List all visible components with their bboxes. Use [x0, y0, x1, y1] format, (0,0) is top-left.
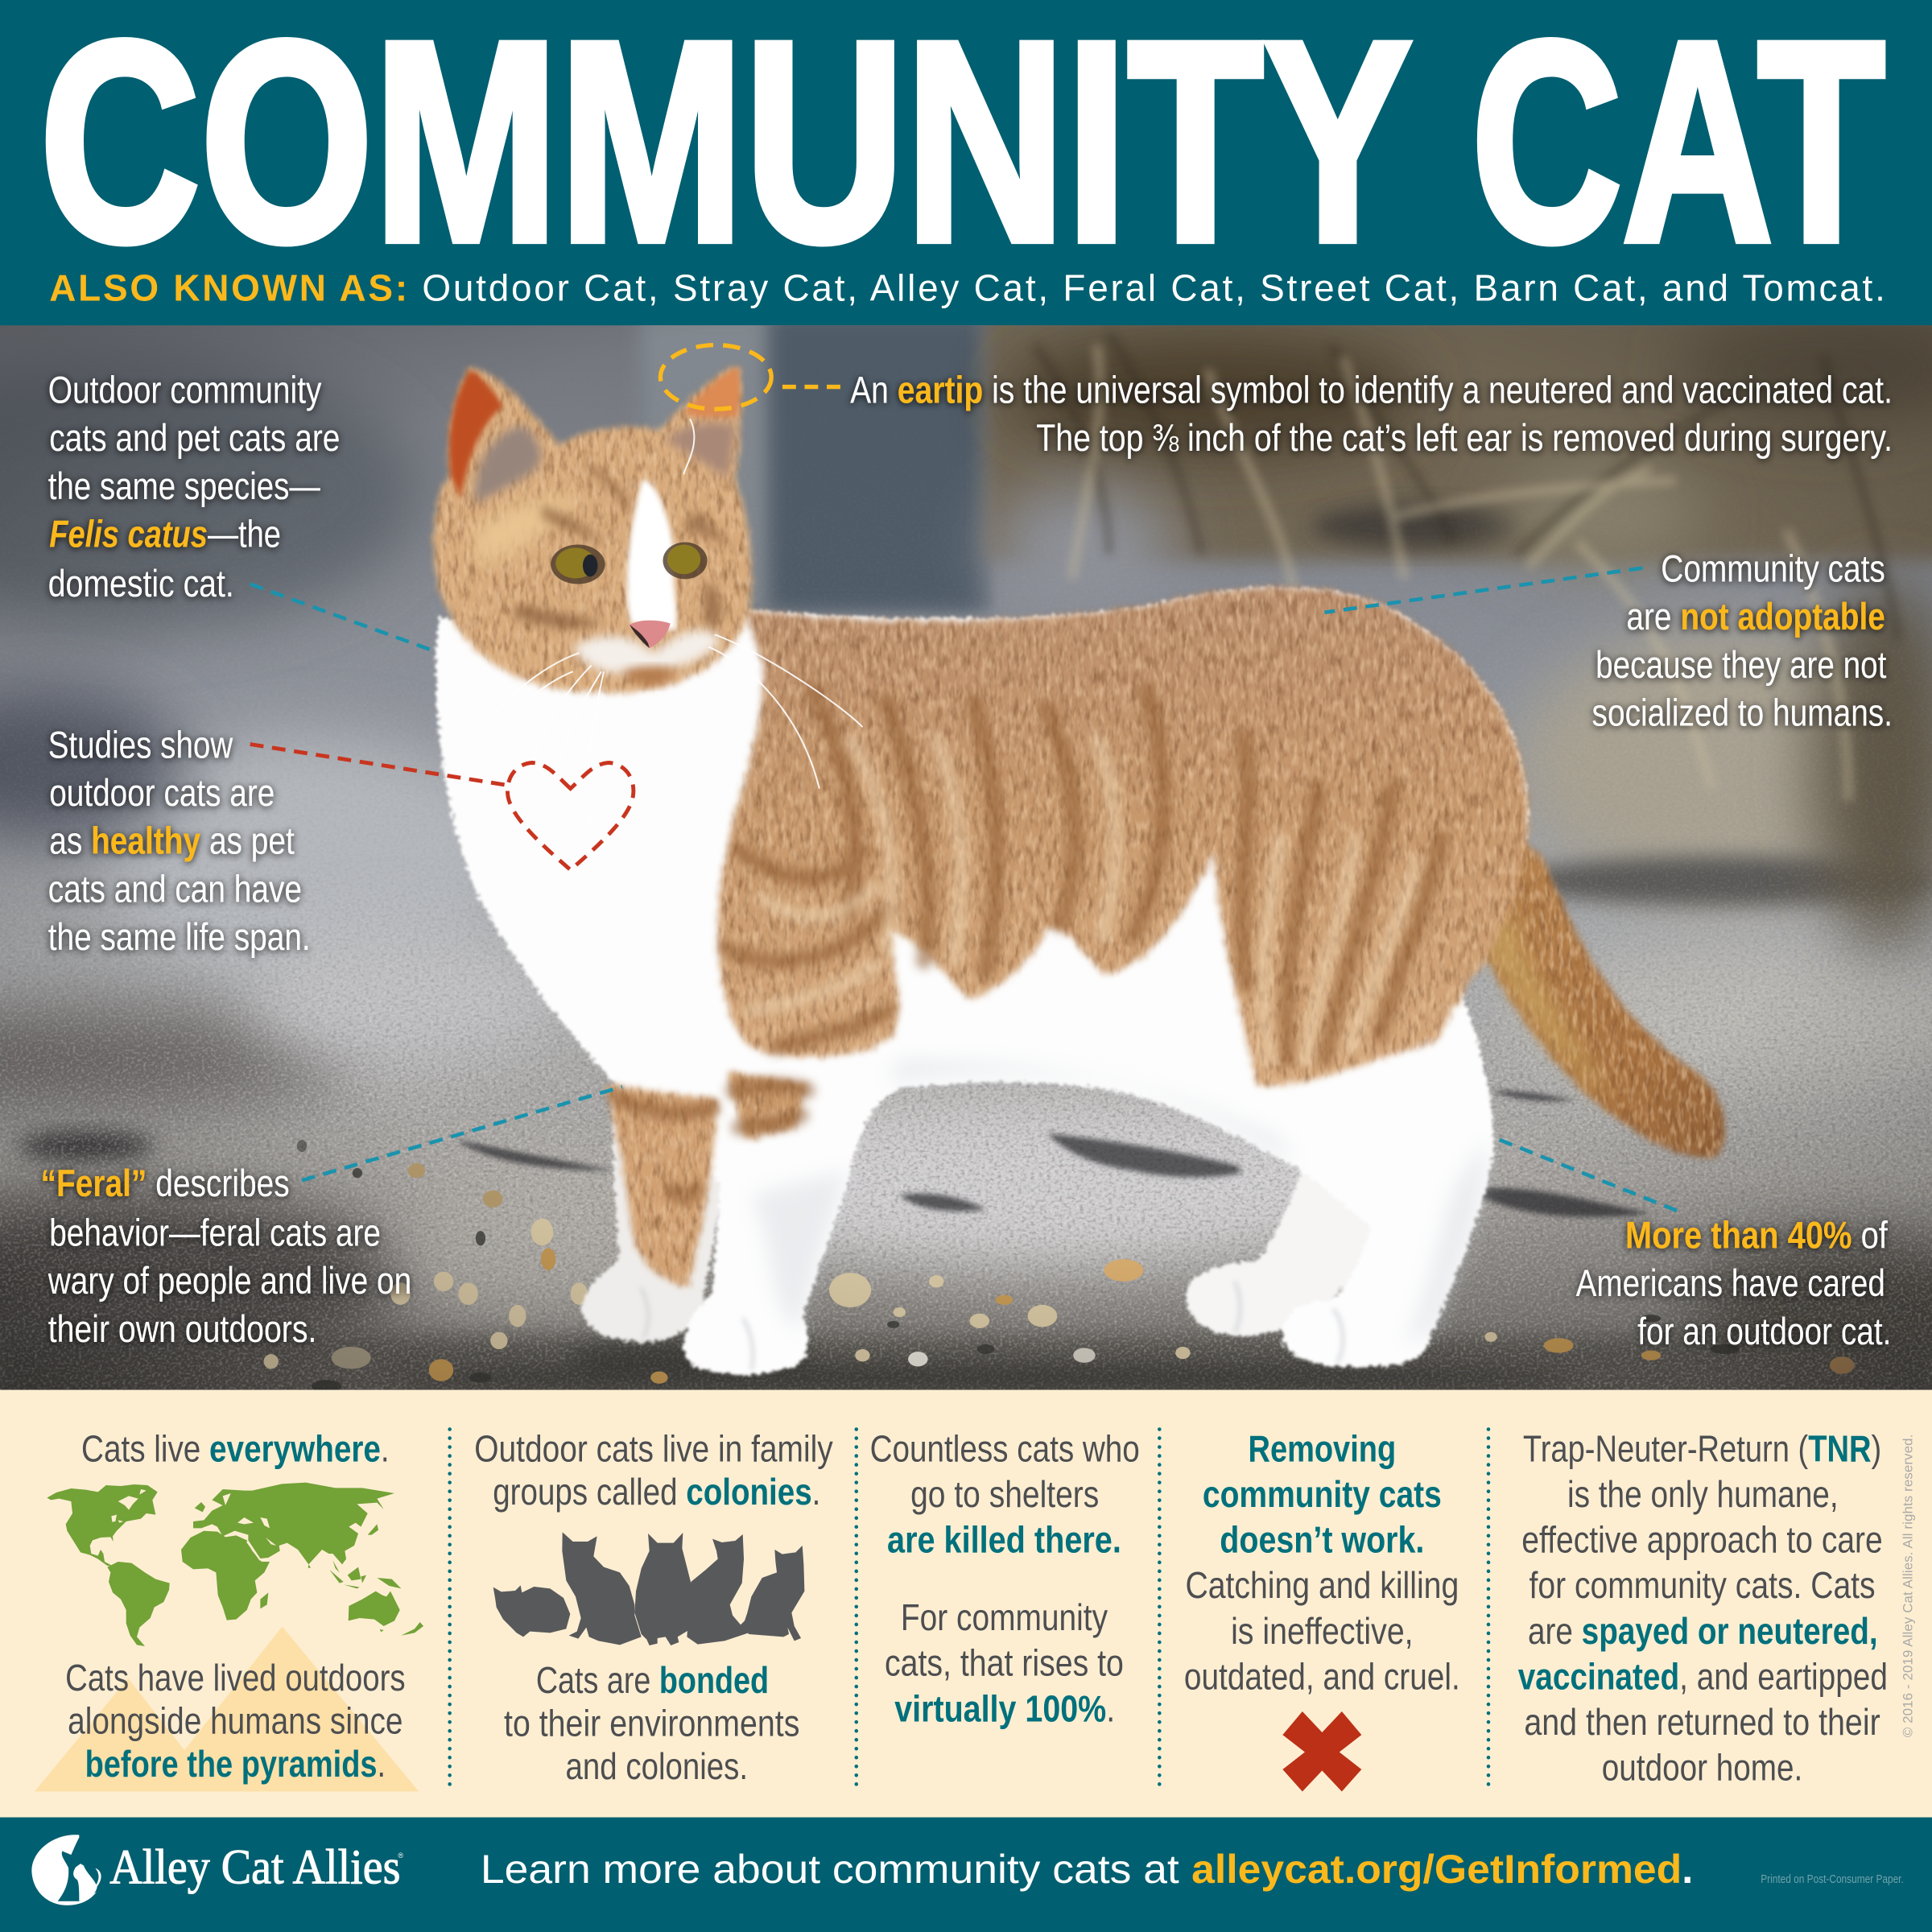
text: felis catus: Outdoor community: [48, 369, 322, 412]
icon: world map: [47, 1483, 423, 1646]
text: healthy: [48, 724, 311, 959]
text: feral: wary of people and live on: [47, 1260, 411, 1302]
cat whiskers: [487, 419, 862, 826]
logo wordmark: Alley Cat Allies: [109, 1840, 400, 1895]
panel: tnr: outdoor home.: [1602, 1747, 1802, 1789]
cat tail: [1466, 838, 1725, 1158]
photo background: [0, 314, 1932, 1411]
panel: cats live everywhere: [35, 1427, 423, 1792]
panel: removing cats: outdated, and cruel.: [1184, 1655, 1460, 1697]
text: felis catus: cats and pet cats are: [49, 417, 340, 460]
panel: tnr: is the only humane,: [1567, 1473, 1839, 1515]
cat white body: [436, 588, 1528, 1374]
panel: removing cats: is ineffective,: [1231, 1610, 1414, 1652]
panel: cat photo: [0, 314, 1932, 1411]
map water cut-outs: [111, 1489, 276, 1546]
text: feral: “Feral” describes: [41, 1162, 290, 1205]
text: eartip: [850, 369, 1893, 460]
also known as line: ALSO KNOWN AS: Outdoor Cat, Stray Cat, Alley Cat, Feral Cat, Street Cat, Barn Cat, and Tomcat.: [49, 266, 1885, 308]
cat head: [434, 366, 862, 826]
text: healthy: Studies show: [48, 724, 233, 766]
text: feral: their own outdoors.: [48, 1308, 316, 1351]
text: feral: behavior—feral cats are: [49, 1212, 381, 1254]
cat eyes: [551, 542, 708, 584]
panel: tnr: for community cats. Cats: [1529, 1564, 1876, 1606]
panel: cats live everywhere: Cats live everywhere.: [81, 1427, 390, 1469]
panel: removing cats: Catching and killing: [1185, 1564, 1459, 1606]
panel: removing cats: doesn’t work.: [1220, 1519, 1424, 1561]
call to action: Learn more about community cats at: [481, 1846, 1179, 1892]
text: feral: [41, 1162, 411, 1351]
cat paws: [641, 1282, 1343, 1370]
panel: colonies: groups called colonies.: [493, 1471, 820, 1513]
panel: colonies: to their environments: [504, 1703, 799, 1744]
cat: [434, 366, 1725, 1374]
panel: shelters: For community: [901, 1596, 1108, 1638]
text: healthy: the same life span.: [48, 916, 311, 959]
cat fur highlights: [749, 739, 1417, 1059]
panel: removing cats: [1184, 1427, 1460, 1792]
panel: shelters: virtually 100%.: [894, 1687, 1115, 1729]
text: healthy: outdoor cats are: [49, 772, 275, 815]
cat soft shading: [752, 1059, 1486, 1343]
text: felis catus: [48, 369, 340, 605]
panel: tnr: and then returned to their: [1524, 1701, 1880, 1743]
call to action: .: [1682, 1846, 1693, 1892]
panel: colonies: Cats are bonded: [536, 1659, 769, 1701]
icon: pyramids: [35, 1626, 419, 1792]
callout: eartip ring: [660, 345, 841, 409]
icon: alley cat allies logo: [31, 1835, 101, 1905]
text: more than 40%: [1576, 1215, 1891, 1353]
text: healthy: as healthy as pet: [49, 820, 295, 863]
pebbles: [264, 1163, 1855, 1384]
panel: tnr: are spayed or neutered,: [1528, 1610, 1878, 1652]
call to action: alleycat.org/GetInformed: [1191, 1846, 1682, 1892]
panel: tnr: [1518, 1427, 1888, 1789]
panel: shelters: are killed there.: [887, 1519, 1121, 1561]
panel: shelters: [870, 1427, 1140, 1729]
header band: [0, 0, 1932, 325]
callout: heart: [250, 744, 634, 870]
dotted dividers: [450, 1430, 1488, 1792]
panel: tnr: Trap-Neuter-Return (TNR): [1523, 1427, 1881, 1469]
copyright: © 2016 - 2019 Alley Cat Allies. All rights reserved.: [1901, 1435, 1916, 1737]
panel: facts background: [0, 1390, 1932, 1818]
text: not adoptable: [1592, 547, 1893, 735]
panel: removing cats: community cats: [1203, 1473, 1442, 1515]
cat nose: [630, 621, 671, 648]
panel: tnr: vaccinated, and eartipped: [1518, 1655, 1888, 1697]
leader lines: [250, 568, 1678, 1212]
icon: cat silhouettes: [493, 1532, 804, 1645]
text: felis catus: domestic cat.: [48, 563, 234, 605]
text: felis catus: Felis catus—the: [49, 514, 281, 556]
text: not adoptable: are not adoptable: [1626, 596, 1885, 638]
panel: colonies: [474, 1427, 833, 1787]
icon: red x: [1282, 1711, 1361, 1792]
panel: shelters: go to shelters: [910, 1473, 1099, 1515]
panel: shelters: cats, that rises to: [885, 1642, 1124, 1684]
text: more than 40%: More than 40% of: [1625, 1215, 1889, 1257]
panel: shelters: Countless cats who: [870, 1427, 1140, 1469]
footer band: [0, 1818, 1932, 1932]
text: felis catus: the same species—: [48, 465, 320, 508]
panel: cats live everywhere: alongside humans since: [68, 1700, 403, 1742]
panel: colonies: and colonies.: [566, 1745, 748, 1787]
cat orange saddle: [606, 588, 1528, 1287]
registered mark: ®: [398, 1852, 403, 1860]
text: not adoptable: Community cats: [1661, 547, 1885, 590]
text: healthy: cats and can have: [48, 868, 302, 910]
panel: cats live everywhere: before the pyramids.: [85, 1743, 386, 1785]
panel: removing cats: Removing: [1249, 1427, 1396, 1469]
panel: cats live everywhere: Cats have lived outdoors: [65, 1657, 406, 1699]
printed note: Printed on Post-Consumer Paper.: [1761, 1873, 1904, 1886]
cat stripes: [616, 690, 1442, 1199]
call to action: [481, 1846, 1693, 1892]
panel: colonies: Outdoor cats live in family: [474, 1427, 833, 1469]
